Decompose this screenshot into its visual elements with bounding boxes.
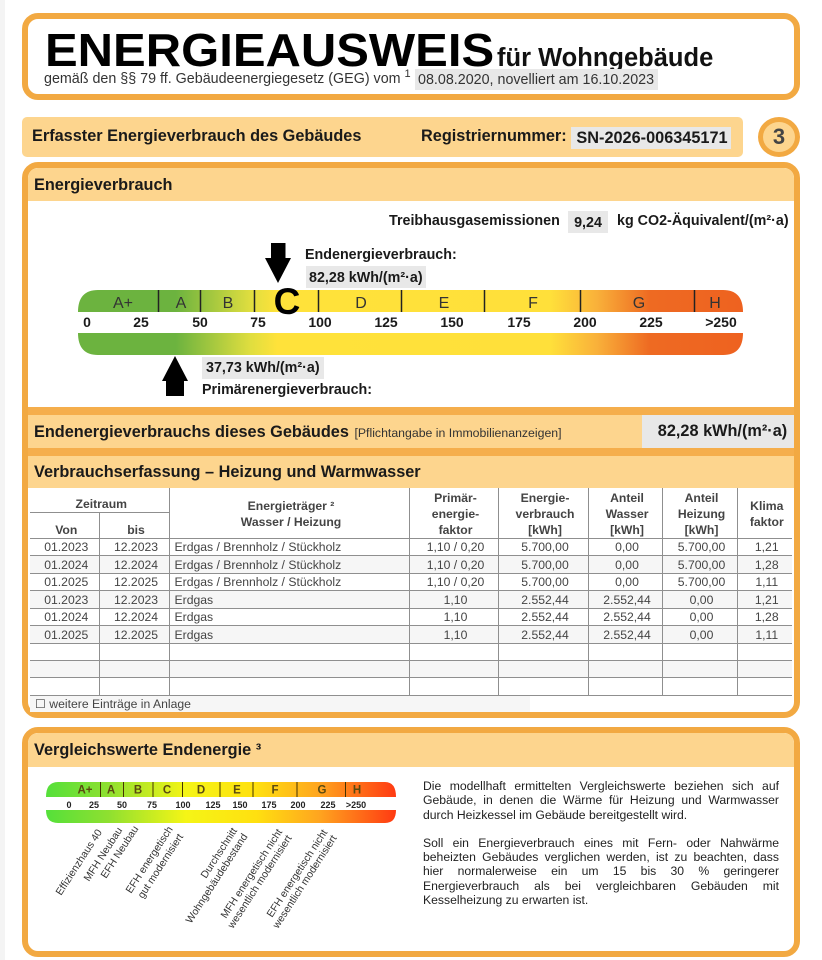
explanatory text: durch Heizkessel im Gebäude bereitgestellt wird.	[423, 808, 687, 822]
rotated labels: MFH Neubau	[82, 826, 125, 884]
consumption table: Erdgas / Brennholz / Stückholz	[175, 540, 341, 554]
table heading	[28, 456, 794, 488]
consumption table: 12.2023	[114, 592, 158, 606]
subtitle: für Wohngebäude	[497, 44, 713, 72]
rotated labels: Wohngebäudebestand	[184, 832, 250, 926]
consumption table: Anteil	[610, 491, 644, 505]
small scale numbers: 75	[147, 800, 157, 810]
final energy label: Endenergieverbrauch:	[305, 247, 457, 263]
scale numbers: >250	[705, 314, 737, 330]
arrow: final energy	[265, 243, 291, 283]
explanatory text: Kesselheizung zu erwarten ist.	[423, 893, 588, 907]
consumption table: 2.552,44	[521, 592, 569, 606]
small upper bar: A	[107, 784, 115, 796]
consumption table: 5.700,00	[678, 558, 725, 572]
lower bar	[78, 333, 743, 355]
scale numbers: 25	[133, 314, 149, 330]
consumption table: Erdgas	[175, 610, 213, 624]
scale numbers: 175	[507, 314, 531, 330]
consumption table: faktor	[750, 515, 784, 529]
small upper bar: E	[233, 784, 241, 796]
rotated labels: gut modernisiert	[136, 832, 186, 901]
comparison chart	[46, 782, 396, 931]
consumption table: 2.552,44	[521, 610, 569, 624]
panel heading	[28, 733, 794, 767]
consumption table: 01.2024	[44, 610, 88, 624]
emissions value: 9,24	[574, 215, 602, 231]
attachment note: ☐ weitere Einträge in Anlage	[35, 697, 191, 711]
consumption table: 2.552,44	[603, 628, 651, 642]
explanatory text	[423, 779, 780, 907]
explanatory text: Energieverbrauch als bei vergleichbaren Gebäuden mit	[423, 879, 779, 893]
consumption table: [kWh]	[685, 523, 718, 537]
consumption table: 5.700,00	[521, 540, 569, 554]
consumption table: 5.700,00	[678, 540, 725, 554]
consumption table: 0,00	[615, 575, 639, 589]
final energy value	[306, 266, 426, 288]
small scale numbers	[66, 800, 366, 810]
consumption table: 2.552,44	[603, 610, 651, 624]
legal reference: gemäß den §§ 79 ff. Gebäudeenergiegesetz (GEG) vom 1	[44, 68, 411, 87]
page number badge: 3	[773, 124, 785, 149]
primary energy value	[202, 357, 324, 379]
consumption table: 12.2023	[114, 540, 158, 554]
consumption table: 12.2025	[114, 575, 158, 589]
small scale numbers: 175	[261, 800, 277, 810]
consumption table: 12.2025	[114, 628, 158, 642]
explanatory text: beheizten Gebäudes verglichen werden, ist zu beachten, dass	[423, 850, 779, 864]
panel heading	[28, 168, 794, 201]
upper rating bar: A	[176, 295, 187, 312]
consumption table: 1,10	[444, 592, 467, 606]
rotated labels: EFH energetisch	[124, 825, 176, 896]
consumption table: Erdgas / Brennholz / Stückholz	[175, 575, 341, 589]
small upper bar: F	[271, 784, 279, 796]
small scale numbers: 25	[89, 800, 99, 810]
rotated labels: Durchschnitt	[199, 826, 240, 881]
consumption table: Klima	[750, 499, 783, 513]
rotated labels: wesentlich modernisiert	[226, 833, 295, 931]
consumption table: faktor	[439, 523, 472, 537]
primary energy label: Primärenergieverbrauch:	[202, 382, 372, 398]
consumption table: Erdgas	[175, 592, 213, 606]
consumption table: Erdgas	[175, 628, 213, 642]
section band	[22, 117, 743, 157]
consumption table: 1,28	[755, 610, 779, 624]
consumption table: 1,10 / 0,20	[427, 540, 484, 554]
small scale numbers: 125	[205, 800, 221, 810]
arrow: primary energy	[162, 356, 188, 396]
consumption table	[30, 488, 792, 696]
small upper bar: H	[353, 784, 361, 796]
consumption table: 0,00	[690, 592, 713, 606]
consumption table: 1,21	[755, 592, 779, 606]
small scale numbers: 225	[320, 800, 336, 810]
consumption table: 12.2024	[114, 610, 158, 624]
section heading: Erfasster Energieverbrauch des Gebäudes	[32, 127, 361, 145]
upper rating bar: H	[709, 295, 721, 312]
emissions value	[568, 211, 608, 233]
consumption table: 5.700,00	[521, 575, 569, 589]
consumption table: [kWh]	[610, 523, 644, 537]
rotated labels: Effizienzhaus 40	[54, 828, 105, 898]
upper rating bar: G	[633, 295, 645, 312]
panel: Energieverbrauch	[22, 162, 800, 718]
small upper bar	[46, 782, 396, 797]
explanatory text: Die modellhaft ermittelten Vergleichswerte beziehen sich auf	[423, 779, 779, 793]
rotated labels: EFH Neubau	[99, 824, 141, 881]
scale numbers: 200	[573, 314, 597, 330]
small upper bar: G	[318, 784, 327, 796]
consumption table: 01.2025	[44, 628, 88, 642]
panel heading: Energieverbrauch	[34, 176, 172, 194]
consumption table: Anteil	[685, 491, 718, 505]
scale numbers: 50	[192, 314, 208, 330]
page edge	[0, 0, 5, 960]
consumption table: 2.552,44	[603, 592, 651, 606]
emissions label: Treibhausgasemissionen	[389, 213, 560, 229]
summary value: 82,28 kWh/(m²·a)	[658, 422, 787, 440]
consumption table: Energie-	[521, 491, 569, 505]
panel heading: Vergleichswerte Endenergie ³	[34, 741, 261, 759]
summary label: Endenergieverbrauchs dieses Gebäudes [Pflichtangabe in Immobilienanzeigen]	[34, 423, 562, 441]
scale numbers: 125	[374, 314, 398, 330]
final energy summary band	[28, 407, 794, 456]
consumption table: 1,28	[755, 558, 779, 572]
upper rating bar: E	[439, 295, 449, 312]
summary value	[642, 415, 794, 448]
consumption table: verbrauch	[516, 507, 574, 521]
consumption table: Heizung	[678, 507, 725, 521]
consumption table: [kWh]	[528, 523, 562, 537]
consumption table: 01.2024	[44, 558, 88, 572]
consumption table: energie-	[432, 507, 479, 521]
small scale numbers: 200	[290, 800, 306, 810]
small upper bar: B	[134, 784, 142, 796]
page number badge	[758, 117, 800, 157]
rotated labels: EFH energetisch nicht	[265, 828, 330, 920]
consumption table: 1,21	[755, 540, 779, 554]
consumption table: Erdgas / Brennholz / Stückholz	[175, 558, 341, 572]
scale numbers: 75	[250, 314, 266, 330]
primary energy value: 37,73 kWh/(m²·a)	[206, 360, 320, 376]
small upper bar: C	[163, 784, 171, 796]
small upper bar: A+	[77, 784, 93, 796]
registration number: SN-2026-006345171	[576, 129, 728, 147]
consumption table: 01.2023	[44, 592, 88, 606]
scale numbers: 0	[83, 314, 91, 330]
upper rating bar: F	[528, 295, 538, 312]
attachment note	[30, 696, 530, 712]
final energy value: 82,28 kWh/(m²·a)	[309, 270, 423, 286]
rotated labels	[54, 824, 340, 931]
consumption table: 1,10	[444, 628, 467, 642]
emissions unit: kg CO2-Äquivalent/(m²·a)	[617, 213, 789, 229]
consumption table: 5.700,00	[678, 575, 725, 589]
scale numbers: 150	[440, 314, 464, 330]
consumption table: 5.700,00	[521, 558, 569, 572]
consumption table: Energieträger ²	[248, 499, 334, 513]
explanatory text: Soll ein Energieverbrauch eines mit Fern- oder Nahwärme	[423, 836, 779, 850]
consumption table: Zeitraum	[76, 497, 127, 511]
consumption table: Wasser	[606, 507, 648, 521]
small scale numbers: >250	[346, 800, 366, 810]
scale numbers: 100	[308, 314, 332, 330]
rotated labels: MFH energetisch nicht	[219, 827, 285, 921]
energy scale chart	[78, 243, 743, 398]
consumption table: Primär-	[434, 491, 477, 505]
consumption table: 1,10 / 0,20	[427, 575, 484, 589]
consumption table: 01.2025	[44, 575, 88, 589]
summary background	[28, 415, 794, 448]
scale numbers	[83, 314, 737, 330]
consumption table: bis	[127, 523, 145, 537]
small upper bar: D	[197, 784, 205, 796]
upper rating bar: A+	[113, 295, 133, 312]
consumption table: Von	[55, 523, 77, 537]
title panel	[22, 13, 800, 100]
class C marker: C	[274, 281, 300, 322]
consumption table: 0,00	[690, 628, 713, 642]
upper rating bar	[78, 281, 743, 322]
small lower bar	[46, 810, 396, 823]
table heading: Verbrauchserfassung – Heizung und Warmwasser	[34, 463, 421, 481]
consumption table: 0,00	[690, 610, 713, 624]
registration label: Registriernummer:	[421, 127, 567, 145]
consumption table: 2.552,44	[521, 628, 569, 642]
upper rating bar: B	[223, 295, 233, 312]
consumption table: 1,11	[755, 575, 778, 589]
consumption table: 12.2024	[114, 558, 158, 572]
small scale numbers: 100	[175, 800, 191, 810]
small scale numbers: 50	[117, 800, 127, 810]
consumption table: 0,00	[615, 540, 639, 554]
consumption table: 01.2023	[44, 540, 88, 554]
rotated labels: wesentlich modernisiert	[271, 833, 340, 931]
panel: Vergleichswerte	[22, 727, 800, 957]
explanatory text: hier normalerweise ein um 15 bis 30 % geringerer	[423, 864, 779, 878]
title: ENERGIEAUSWEIS	[45, 24, 494, 76]
upper rating bar: D	[355, 295, 367, 312]
consumption table: 1,10	[444, 610, 467, 624]
small scale numbers: 150	[232, 800, 248, 810]
scale numbers: 225	[639, 314, 663, 330]
emissions row	[389, 211, 789, 233]
small scale numbers: 0	[66, 800, 72, 810]
date field: 08.08.2020, novelliert am 16.10.2023	[418, 72, 654, 88]
consumption table: Wasser / Heizung	[241, 515, 341, 529]
consumption table: 1,11	[755, 628, 778, 642]
consumption table: 0,00	[615, 558, 639, 572]
consumption table: 1,10 / 0,20	[427, 558, 484, 572]
explanatory text: Gebäude, in denen die Wärme für Heizung und Warmwasser	[423, 793, 779, 807]
